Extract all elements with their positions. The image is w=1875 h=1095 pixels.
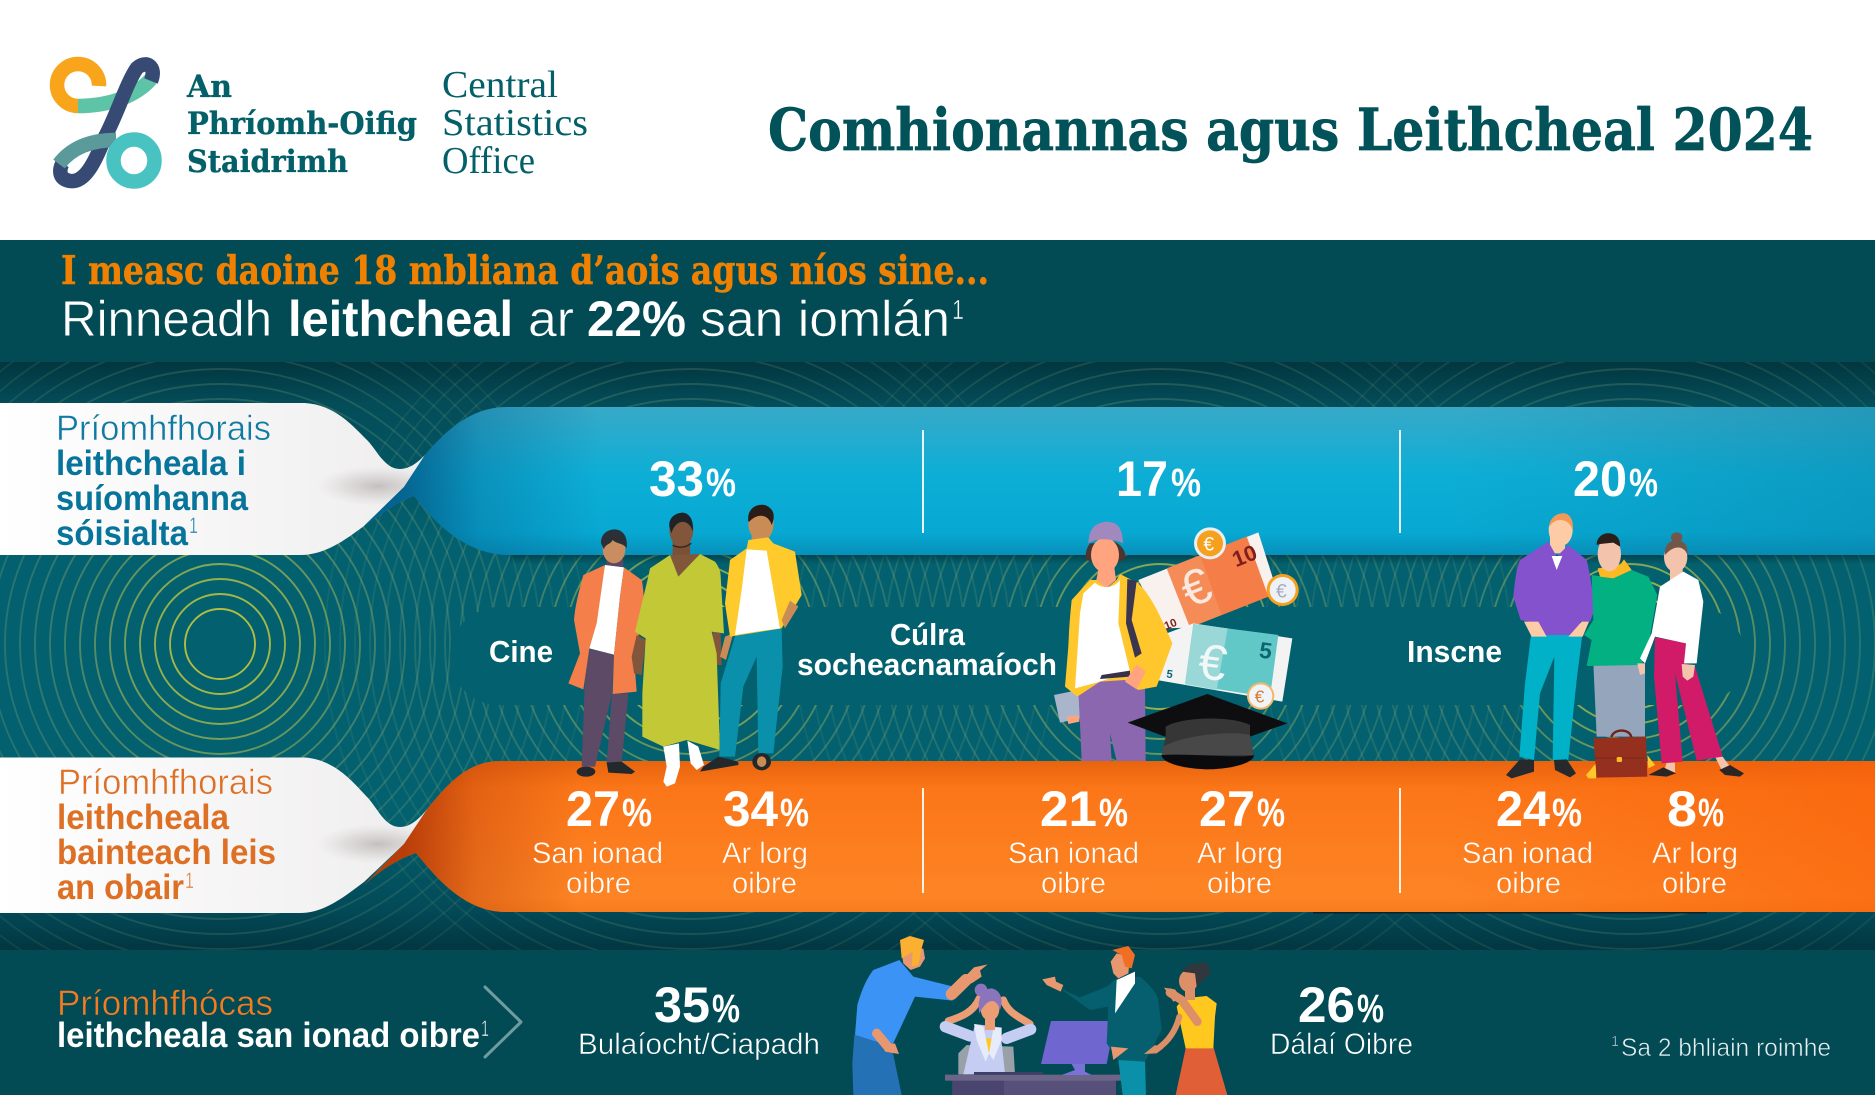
work stats: Inscne: 24 — [1496, 781, 1550, 837]
banner statement: 1 — [952, 294, 964, 325]
percentages: social: % — [706, 461, 736, 505]
banknote: five euro: 5 — [1258, 637, 1274, 664]
work stats: Cine: oibre — [566, 867, 631, 900]
category labels: Cúlra — [890, 617, 966, 652]
stat: bullying: Bulaíocht/Ciapadh — [578, 1028, 820, 1061]
white callout shape — [0, 758, 428, 913]
header — [57, 64, 1813, 182]
callout text: Príomhfhorais — [58, 763, 273, 802]
work stats: Cine: % — [780, 791, 809, 835]
banner statement: ar — [528, 291, 574, 347]
banner statement: 22% — [587, 291, 686, 347]
percentages: social: % — [1629, 461, 1658, 505]
banner statement: Rinneadh — [61, 291, 272, 347]
work stats: Cúlra: Ar lorg — [1197, 837, 1283, 870]
stat: bullying: 35 — [654, 977, 710, 1033]
category labels: socheacnamaíoch — [797, 647, 1057, 682]
callout text: suíomhanna — [56, 479, 248, 518]
banknote: ten euro: 10 — [1163, 617, 1179, 633]
person centre in dress — [632, 513, 724, 787]
stat: working conditions: 26 — [1298, 977, 1355, 1033]
logo wordmark Irish: An — [186, 69, 232, 105]
stat: bullying: % — [712, 987, 740, 1031]
work stats: Cúlra: 21 — [1040, 781, 1097, 837]
illustration: three people, gender — [1506, 513, 1744, 778]
work stats: Cine — [532, 781, 809, 900]
person right — [700, 505, 802, 772]
student — [1054, 522, 1172, 761]
work stats: Cine: oibre — [732, 867, 797, 900]
stat: working conditions: Dálaí Oibre — [1270, 1028, 1413, 1061]
work stats: Inscne: % — [1698, 791, 1724, 835]
blue ribbon shape — [364, 407, 1875, 564]
work stats: Inscne: Ar lorg — [1652, 837, 1738, 870]
work stats: Cine: 27 — [566, 781, 620, 837]
top banner — [0, 240, 1875, 362]
category labels — [489, 617, 1502, 682]
panel: social settings ribbon — [0, 403, 1875, 564]
work stats: Cine: San ionad — [532, 837, 663, 870]
bottom heading: leithcheala san ionad oibre — [57, 1016, 480, 1055]
illustration: student, banknotes, mortarboard — [1054, 522, 1299, 769]
work stats: Inscne: 8 — [1667, 781, 1697, 837]
man in green hoodie — [1584, 533, 1657, 778]
coins: € — [1255, 687, 1265, 707]
work stats: Cúlra: % — [1099, 791, 1128, 835]
illustration: workplace conflict — [852, 936, 1227, 1095]
percentages: social: 20 — [1573, 451, 1627, 507]
work stats: Inscne: oibre — [1662, 867, 1727, 900]
orange ribbon shape — [364, 761, 1875, 914]
coins: € — [1276, 581, 1287, 602]
category labels: Cine — [489, 634, 553, 669]
arrow: chevron — [485, 987, 521, 1057]
bottom banner — [0, 936, 1875, 1095]
logo wordmark Irish: Phríomh-Oifig — [187, 106, 417, 142]
work stats: Cúlra: oibre — [1041, 867, 1106, 900]
footnote: 1 — [1611, 1033, 1619, 1050]
callout text: Príomhfhorais — [56, 409, 271, 448]
footnote: Sa 2 bhliain roimhe — [1621, 1034, 1831, 1062]
percentages: social: 17 — [1116, 451, 1168, 507]
callout text: sóisialta — [56, 514, 188, 553]
man in suit — [1042, 946, 1162, 1095]
callout text: leithcheala i — [56, 444, 246, 483]
work stats: Inscne: oibre — [1496, 867, 1561, 900]
coins: € — [1203, 535, 1214, 556]
logo wordmark Irish — [186, 69, 417, 180]
banknote: five euro: 5 — [1166, 668, 1174, 681]
work stats: Cine: Ar lorg — [722, 837, 808, 870]
woman in white — [1637, 532, 1744, 777]
bottom heading — [57, 984, 489, 1055]
stat: working conditions: % — [1357, 987, 1384, 1031]
woman in yellow — [1144, 962, 1227, 1095]
category labels: Inscne — [1407, 634, 1502, 669]
work stats: Inscne: % — [1552, 791, 1582, 835]
person left — [568, 529, 644, 777]
work stats: Cúlra: oibre — [1207, 867, 1272, 900]
panel: work related ribbon — [0, 758, 1875, 914]
logo wordmark English — [442, 64, 588, 182]
work stats: Cúlra: 27 — [1199, 781, 1255, 837]
percentages: social — [649, 451, 1658, 507]
man pointing — [852, 936, 988, 1095]
callout text: leithcheala — [57, 798, 229, 837]
banknote: five euro — [1157, 623, 1292, 702]
illustration: three people, race — [568, 505, 802, 787]
bottom heading: 1 — [481, 1016, 489, 1041]
banknote: five euro: € — [1195, 633, 1231, 692]
callout text: 1 — [189, 513, 198, 538]
work stats: Cúlra — [1008, 781, 1285, 900]
patterned background band — [0, 362, 1875, 950]
logo icon — [57, 64, 154, 182]
callout text: bainteach leis — [57, 833, 276, 872]
callout text: an obair — [57, 868, 184, 907]
work stats: Cúlra: San ionad — [1008, 837, 1139, 870]
banknote: ten euro — [1138, 532, 1277, 633]
banner statement: san iomlán — [700, 291, 950, 347]
percentages: social: 33 — [649, 451, 704, 507]
monitor — [1041, 1021, 1115, 1075]
work stats: Inscne — [1462, 781, 1738, 900]
logo wordmark English: Central — [442, 64, 558, 106]
work stats: Cine: % — [622, 791, 652, 835]
stat: bullying — [578, 977, 820, 1061]
banner heading: I measc daoine 18 mbliana d’aois agus níos sine... — [61, 248, 989, 294]
logo wordmark Irish: Staidrimh — [187, 144, 348, 180]
work stats: Cine: 34 — [723, 781, 778, 837]
work stats: Inscne: San ionad — [1462, 837, 1593, 870]
work stats: Cúlra: % — [1257, 791, 1285, 835]
logo wordmark English: Office — [442, 140, 535, 182]
banner statement — [61, 291, 964, 347]
seated woman — [945, 984, 1031, 1074]
mortarboard — [1128, 694, 1287, 769]
desk — [945, 1072, 1123, 1095]
banner statement: leithcheal — [288, 291, 513, 347]
briefcase — [1593, 731, 1647, 778]
percentages: social: % — [1171, 461, 1201, 505]
coins — [1194, 527, 1299, 710]
callout text — [57, 763, 276, 907]
man in purple — [1506, 513, 1594, 778]
logo wordmark English: Statistics — [442, 102, 588, 144]
banknote: ten euro: 10 — [1229, 540, 1261, 572]
bottom heading: Príomhfhócas — [57, 984, 273, 1023]
stat: working conditions — [1270, 977, 1413, 1061]
callout text — [56, 409, 271, 553]
white callout shape — [0, 403, 425, 555]
callout text: 1 — [185, 868, 194, 893]
banknote: ten euro: € — [1172, 556, 1219, 619]
middle label pill — [450, 607, 1745, 705]
